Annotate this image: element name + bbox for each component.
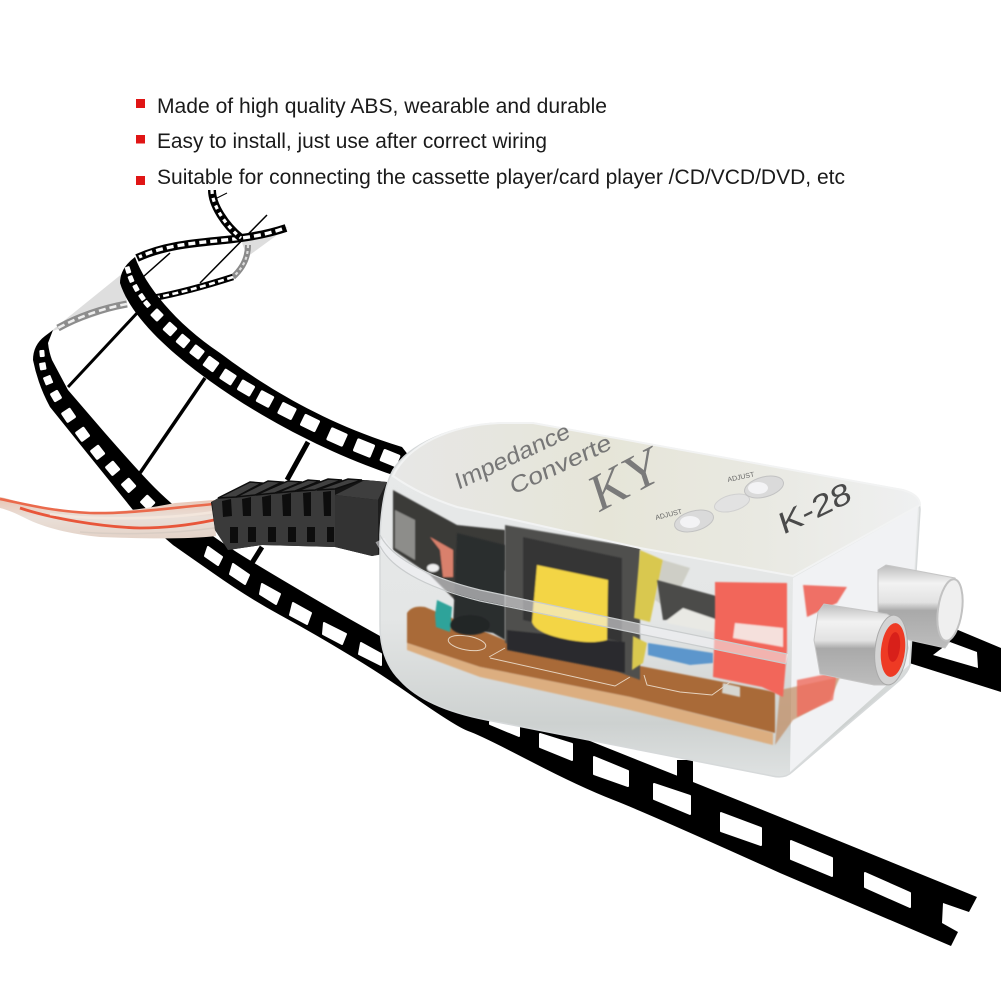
translucent film panels <box>50 227 288 332</box>
connector block <box>335 480 387 500</box>
connector rib tops <box>218 479 362 498</box>
audio cable <box>0 497 216 538</box>
adjust knob hole 1: ADJUST <box>655 508 684 522</box>
front case lid seam <box>380 535 787 664</box>
transformer <box>505 525 640 680</box>
film frame divider lines <box>68 193 693 784</box>
red terminal block <box>713 582 847 717</box>
upper film strip <box>120 257 420 474</box>
top panel <box>393 423 920 576</box>
socket white face <box>934 578 966 642</box>
adjust knob hole 1 <box>655 506 716 536</box>
text: installation: Easy to install, just use after correct wiring <box>157 130 547 153</box>
text: material: Made of high quality ABS, wearable and durable <box>157 95 607 118</box>
film strip graphic <box>33 190 1001 946</box>
label: Converte: Converte <box>507 428 614 500</box>
bullet 3 <box>136 176 145 185</box>
lower film strip <box>33 330 977 946</box>
feature list <box>136 95 845 189</box>
clear case body <box>380 423 920 777</box>
bullet 1 <box>136 99 145 108</box>
text: compatibility: Suitable for connecting the cassette player/card player /CD/VCD/DVD, etc <box>157 166 845 189</box>
connector rib faces <box>212 489 335 550</box>
dark interior left <box>393 490 505 600</box>
faded film curl pieces <box>58 245 248 328</box>
circuit board <box>407 607 840 745</box>
film strip right end <box>900 612 1001 692</box>
socket metal rim <box>871 614 911 686</box>
board traces <box>447 633 733 695</box>
right side face <box>790 507 918 772</box>
electrolytic capacitors <box>435 533 505 640</box>
rubber strain relief connector <box>211 479 387 556</box>
trimmer potentiometers <box>648 580 740 697</box>
RCA socket: front with red insulator <box>814 604 911 686</box>
label: Impedance: Impedance <box>452 417 573 495</box>
yellow capacitor <box>632 550 690 670</box>
impedance converter device <box>380 417 920 777</box>
socket red insulator <box>878 622 908 678</box>
label: KY logo: KY <box>584 434 668 524</box>
film curl upper pieces <box>137 190 286 298</box>
label: K-28: K-28 <box>775 476 855 542</box>
adjust knob hole 2 <box>713 491 751 515</box>
RCA socket: rear <box>878 565 966 648</box>
bullet 2 <box>136 135 145 144</box>
adjust knob hole 3: ADJUST <box>727 471 756 484</box>
connector slots <box>222 491 334 543</box>
red wire stripes <box>0 499 214 534</box>
adjust knob hole 3 <box>727 471 786 502</box>
